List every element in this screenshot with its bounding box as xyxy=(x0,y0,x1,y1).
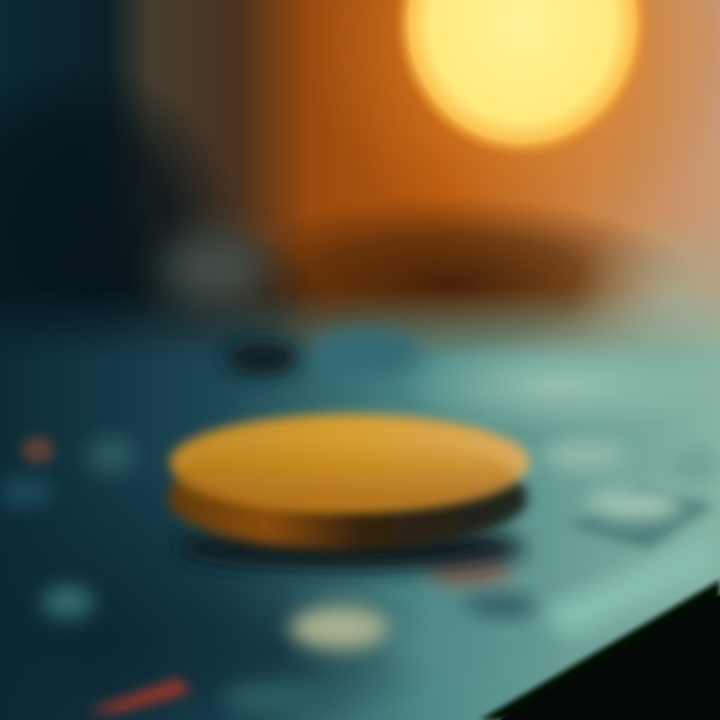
coin side xyxy=(168,446,528,550)
keyboard keys: blurred shapes xyxy=(0,328,719,712)
coin top face xyxy=(170,414,530,510)
coin shadow xyxy=(175,524,525,572)
background: upper wall xyxy=(0,0,720,356)
icon: glowing sun xyxy=(305,0,720,240)
coin lower shading xyxy=(175,441,515,509)
shadow: dark lower right corner xyxy=(480,580,720,720)
icon: golden coin xyxy=(168,414,530,572)
background: blurred object behind coin xyxy=(160,232,270,304)
